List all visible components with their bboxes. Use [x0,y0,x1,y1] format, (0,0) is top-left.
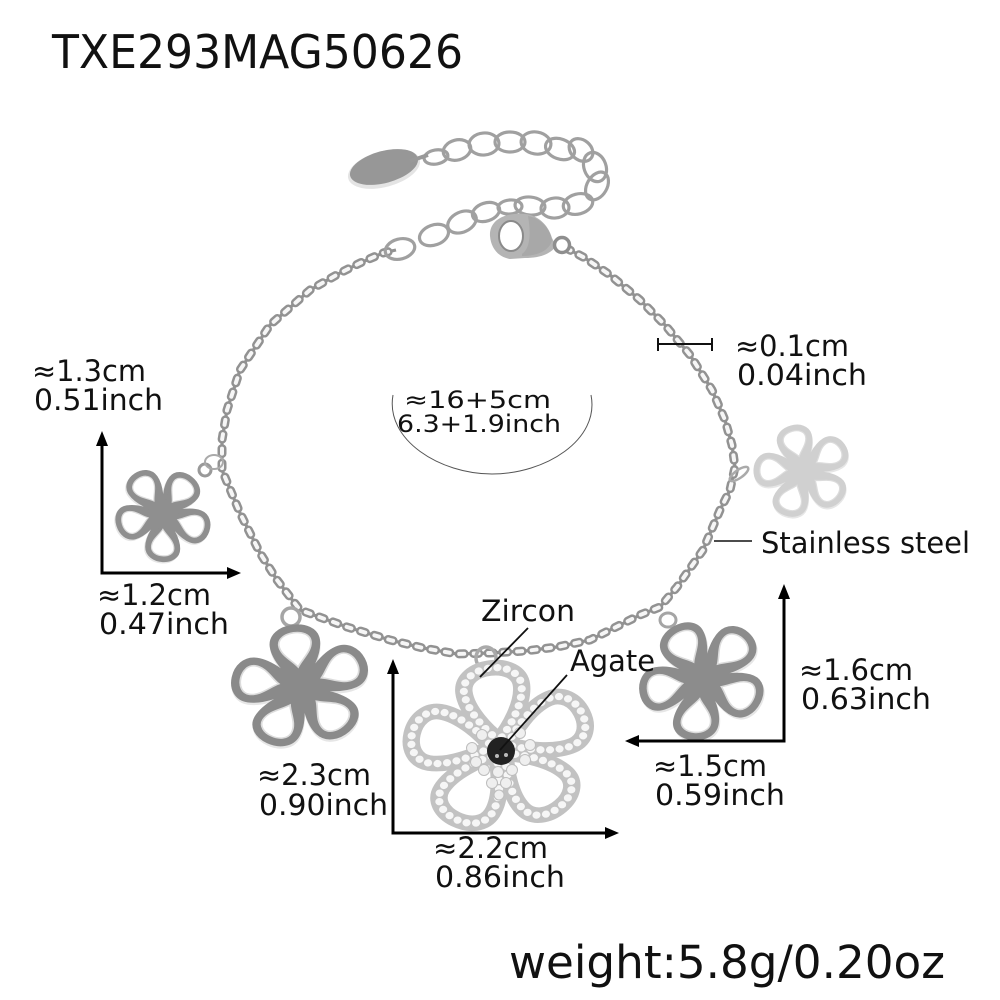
zircon callout [480,594,575,677]
chain width marker [658,329,867,392]
right flower size arrows [625,584,931,812]
lobster clasp [490,214,570,259]
small flower size arrows: 0.47inch [99,607,229,641]
length arc with label: 6.3+1.9inch [397,410,561,438]
oval tag [344,142,428,196]
length arc with label [392,386,592,474]
zircon callout: Zircon [481,594,575,628]
right flower size arrows: ≈1.5cm [653,749,767,783]
length arc with label: ≈16+5cm [404,386,551,414]
charm: small flower left [95,448,229,581]
weight label: weight:5.8g/0.20oz [509,936,945,989]
zircon flower size arrows [257,659,619,894]
right flower size arrows: ≈1.6cm [799,653,913,687]
charm: zircon flower [396,647,604,839]
small flower size arrows [32,354,241,641]
extender chain [383,130,613,263]
small flower size arrows: 0.51inch [34,383,163,417]
stainless steel callout: Stainless steel [761,526,970,560]
charm: flower right upper [728,415,863,529]
right flower size arrows: 0.59inch [655,778,785,812]
chain width marker: ≈0.1cm [735,329,849,363]
agate callout: Agate [570,644,655,678]
title: product code: TXE293MAG50626 [51,25,463,79]
charm: flower right lower [618,598,789,762]
bracelet chain [222,248,735,654]
right flower size arrows: 0.63inch [801,682,931,716]
zircon flower size arrows: 0.86inch [435,860,565,894]
zircon flower size arrows: 0.90inch [259,788,388,822]
small flower size arrows: ≈1.2cm [97,578,211,612]
small flower size arrows: ≈1.3cm [32,354,146,388]
charm: large flower left [223,608,379,758]
agate callout [500,644,655,750]
zircon flower size arrows: ≈2.2cm [433,831,548,865]
zircon flower size arrows: ≈2.3cm [257,758,371,792]
chain width marker: 0.04inch [737,358,867,392]
